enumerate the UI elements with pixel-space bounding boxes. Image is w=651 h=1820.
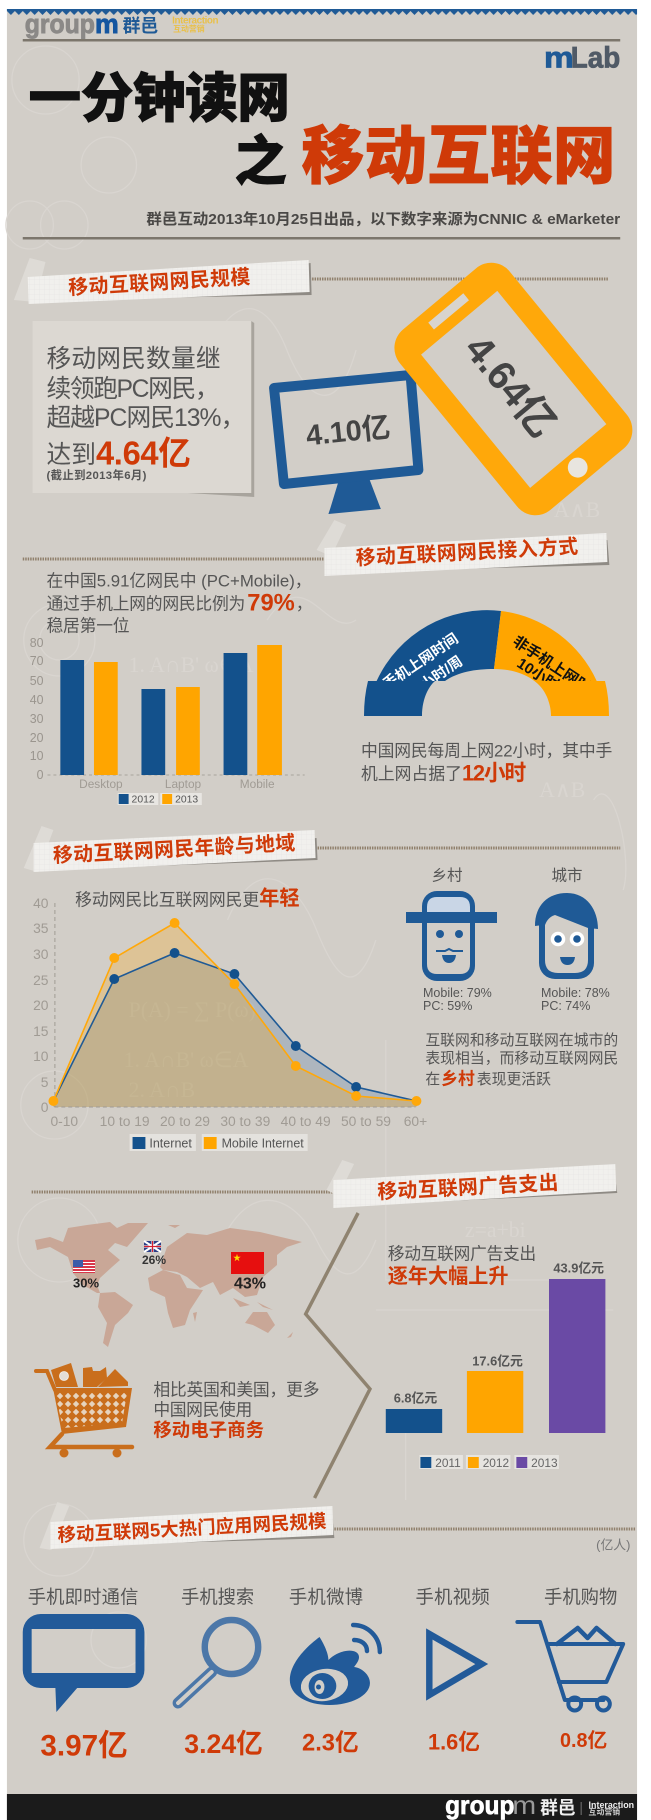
text: younger users: 年轻 — [259, 887, 300, 910]
section 2 label: 移动互联网网民接入方式 — [355, 535, 579, 570]
app values: 3.97亿 — [40, 1729, 128, 1763]
background math doodles: 1. A∩B' ω∈A — [124, 1048, 249, 1072]
text: mobile share: 79% — [247, 589, 295, 617]
icon: urban person: 城市 — [551, 866, 583, 884]
icon: rural person: Mobile: 79% — [423, 986, 492, 1000]
panel: mobile users text: (截止到2013年6月) — [46, 468, 147, 482]
bar chart: device share: 0 — [37, 768, 44, 782]
chart: age distribution: 0 — [41, 1099, 49, 1115]
bar chart: ad spending: 2011 — [435, 1456, 461, 1470]
background math doodles: A∧B — [539, 778, 585, 802]
chart: age distribution: Mobile Internet — [222, 1135, 304, 1151]
icon: shopping cart blue — [517, 1622, 623, 1710]
bar chart: device share: 10 — [30, 749, 44, 763]
panel: mobile users text: 达到 — [46, 441, 96, 469]
world map with flags: 26% — [142, 1253, 166, 1267]
chart: age distribution: 50 to 59 — [341, 1113, 391, 1129]
icon: rural person: PC: 59% — [423, 999, 472, 1013]
text: younger users: 移动网民比互联网网民更 — [75, 890, 259, 910]
text: weekly hours — [361, 741, 612, 786]
app labels: 手机即时通信 — [28, 1586, 138, 1608]
chart: age distribution: 20 — [33, 997, 49, 1013]
bar chart: ad spending — [386, 1260, 605, 1470]
icon: urban person: Mobile: 78% — [541, 986, 610, 1000]
groupm logo: m — [95, 9, 119, 39]
app labels: 手机视频 — [415, 1586, 490, 1608]
groupm logo: group — [25, 9, 95, 39]
mLab logo: Lab — [571, 41, 620, 75]
world map with flags: 30% — [73, 1276, 99, 1290]
groupm logo: 群邑 — [123, 16, 158, 36]
text: rural vs urban: 表现更活跃 — [477, 1071, 551, 1088]
chart: age distribution — [33, 895, 427, 1151]
background math doodles: A∧B — [554, 498, 600, 522]
section 5 label: 移动互联网5大热门应用网民规模 — [57, 1510, 327, 1546]
bar chart: device share: Mobile — [240, 777, 275, 791]
app labels — [28, 1586, 617, 1608]
bar chart: ad spending: 2013 — [531, 1456, 558, 1470]
icon: phone: 4.64亿 — [456, 327, 564, 446]
section 5 label — [40, 1502, 334, 1550]
panel: mobile users text — [33, 321, 254, 497]
footer logo — [445, 1792, 634, 1820]
background math doodles: 2. A∩B — [129, 1078, 195, 1102]
unit note: (亿人) — [596, 1537, 630, 1553]
chart: weekly online hours arch: 手机上网时间 — [380, 630, 462, 693]
text: rural vs urban — [425, 1032, 618, 1089]
bar chart: device share: 30 — [30, 712, 44, 726]
text: rural vs urban: 互联网和移动互联网在城市的 — [425, 1032, 618, 1049]
text: ad spending — [388, 1244, 536, 1288]
groupm logo — [25, 9, 219, 39]
text: rural vs urban: 在 — [425, 1071, 440, 1088]
section 1 label — [14, 258, 312, 304]
app labels: 手机搜索 — [181, 1586, 254, 1608]
bar chart: device share: 50 — [30, 674, 44, 688]
text: younger users — [75, 887, 300, 910]
bar chart: ad spending: 43.9亿元 — [553, 1260, 604, 1276]
bar chart: device share: 2012 — [132, 794, 155, 806]
chart: weekly online hours arch: 10小时/周 — [514, 655, 578, 705]
icon: urban person — [535, 866, 610, 1013]
mLab logo — [544, 41, 620, 75]
chart: age distribution: 30 — [33, 946, 49, 962]
bar chart: device share: 70 — [30, 654, 44, 668]
chart: age distribution: 30 to 39 — [220, 1113, 271, 1129]
chart: age distribution: 5 — [41, 1074, 49, 1090]
text: mobile share: 在中国5.91亿网民中 (PC+Mobile)， — [46, 571, 312, 591]
chart: age distribution: 35 — [33, 920, 49, 936]
app values — [40, 1729, 607, 1763]
icon: rural person: 乡村 — [431, 866, 463, 884]
app values: 3.24亿 — [184, 1729, 263, 1759]
section 5 dotted rule — [334, 1528, 636, 1530]
mLab logo: m — [544, 41, 574, 75]
bar chart: device share: Desktop — [79, 777, 123, 791]
chart: age distribution: 0-10 — [50, 1113, 78, 1129]
app labels: 手机微博 — [289, 1586, 363, 1608]
chart: age distribution: 40 to 49 — [281, 1113, 331, 1129]
icon: magnifier — [178, 1620, 258, 1703]
text: mobile commerce: 相比英国和美国，更多 — [153, 1380, 320, 1400]
icon: urban person: PC: 74% — [541, 999, 590, 1013]
text: mobile share: 稳居第一位 — [46, 616, 130, 636]
groupm logo: Interaction — [172, 15, 219, 27]
icon: phone — [385, 253, 642, 525]
icon: rural person — [406, 866, 497, 1013]
groupm logo: 互动营销 — [173, 23, 205, 34]
chart: weekly online hours arch: 非手机上网时间 — [510, 633, 606, 705]
chart: age distribution: 40 — [33, 895, 49, 911]
chart: age distribution: 60+ — [404, 1113, 427, 1129]
text: ad spending: 逐年大幅上升 — [388, 1265, 508, 1288]
chart: weekly online hours arch — [364, 610, 609, 716]
world map with flags — [35, 1222, 302, 1347]
app values: 1.6亿 — [428, 1729, 480, 1755]
text: weekly hours: 中国网民每周上网22小时，其中手 — [361, 741, 612, 761]
top zigzag strip — [7, 9, 637, 15]
title — [29, 69, 615, 192]
text: mobile share: 通过手机上网的网民比例为 — [46, 594, 245, 614]
icon: chat bubble — [23, 1614, 144, 1712]
panel: mobile users text: 续领跑PC网民， — [46, 375, 220, 403]
text: weekly hours: 12小时 — [462, 760, 526, 786]
section 1 label: 移动互联网网民规模 — [68, 265, 251, 299]
footer logo: 群邑 — [540, 1798, 576, 1818]
panel: mobile users text: 超越PC网民13%， — [46, 404, 245, 432]
chart: age distribution: 20 to 29 — [160, 1113, 210, 1129]
zigzag divider — [306, 1213, 370, 1498]
title: 移动互联网 — [302, 122, 615, 192]
title: 一分钟读网 — [29, 69, 290, 129]
bar chart: device share — [30, 636, 305, 806]
section 3 label — [24, 826, 318, 872]
header rule lower — [23, 237, 620, 240]
bar chart: device share: 80 — [30, 636, 44, 650]
section 3 dotted rule — [318, 846, 620, 850]
section 2 dotted rule — [23, 558, 324, 560]
bar chart: ad spending: 2012 — [483, 1456, 509, 1470]
background math doodles: z=a+bi — [465, 1218, 526, 1242]
world map with flags: ★ — [233, 1254, 241, 1262]
section 1 dotted rule — [310, 278, 608, 280]
bar chart: ad spending: 6.8亿元 — [394, 1390, 437, 1406]
app values: 2.3亿 — [302, 1729, 359, 1757]
chart: age distribution: Internet — [149, 1135, 192, 1151]
panel: mobile users text: 4.64亿 — [96, 434, 191, 472]
text: mobile share — [46, 571, 313, 636]
text: mobile commerce: 中国网民使用 — [153, 1399, 252, 1420]
section 4 label — [326, 1160, 617, 1208]
chart: age distribution: 10 to 19 — [100, 1113, 150, 1129]
icon: monitor — [274, 375, 418, 514]
icon: weibo — [290, 1625, 380, 1705]
text: rural vs urban: 表现相当，而移动互联网网民 — [425, 1050, 618, 1067]
chart: age distribution: 10 — [33, 1048, 49, 1064]
footer logo: 互动营销 — [589, 1806, 620, 1817]
text: mobile share: ， — [296, 594, 313, 614]
icon: monitor: 4.10亿 — [305, 412, 392, 452]
bar chart: device share: 2013 — [175, 794, 198, 806]
chart: weekly online hours arch: 12小时/周 — [404, 653, 466, 702]
text: mobile commerce — [153, 1380, 320, 1441]
text: rural vs urban: 乡村 — [441, 1068, 475, 1089]
chart: age distribution: 25 — [33, 972, 49, 988]
footer logo: m — [512, 1792, 536, 1820]
text: weekly hours: 机上网占据了 — [361, 764, 462, 784]
text: ad spending: 移动互联网广告支出 — [388, 1244, 536, 1264]
icon: play — [429, 1634, 482, 1695]
section 3 label: 移动互联网网民年龄与地域 — [52, 832, 296, 867]
icon: shopping cart orange — [36, 1363, 132, 1458]
world map with flags: 43% — [234, 1276, 266, 1292]
chart: age distribution: 15 — [33, 1023, 49, 1039]
subtitle: 群邑互动2013年10月25日出品，以下数字来源为CNNIC & eMarketer — [146, 210, 620, 228]
section 4 label: 移动互联网广告支出 — [377, 1172, 559, 1204]
background math doodles: P(A) = ∑ P(ω) — [129, 998, 256, 1022]
section 2 label — [317, 520, 609, 576]
bar chart: device share: 40 — [30, 693, 44, 707]
text: mobile commerce: 移动电子商务 — [153, 1419, 264, 1441]
header rule — [23, 39, 620, 42]
app labels: 手机购物 — [544, 1586, 617, 1608]
app values: 0.8亿 — [560, 1730, 607, 1752]
background math doodles: 1. A∩B' ω∈A — [129, 653, 254, 677]
footer logo: Interaction — [589, 1800, 634, 1810]
footer bar — [7, 1794, 637, 1820]
bar chart: ad spending: 17.6亿元 — [472, 1353, 523, 1369]
bar chart: device share: 20 — [30, 731, 44, 745]
panel: mobile users text: 移动网民数量继 — [46, 345, 221, 373]
section 4 dotted rule — [32, 1190, 333, 1194]
bar chart: device share: Laptop — [165, 777, 202, 791]
title: 之 — [234, 132, 287, 192]
footer logo: group — [445, 1792, 514, 1820]
